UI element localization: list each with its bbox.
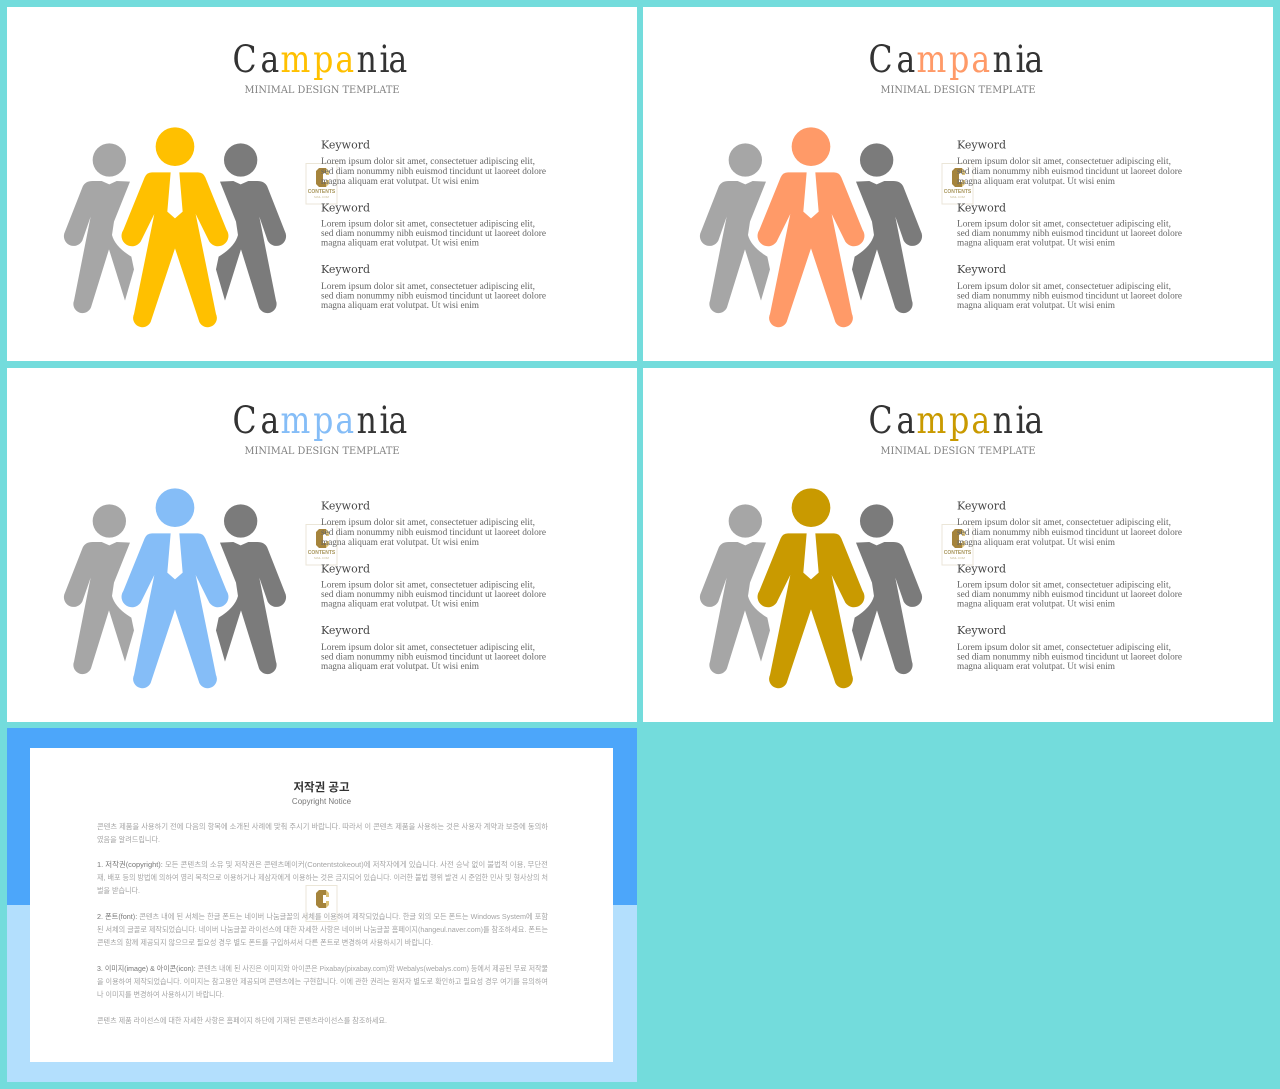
- text block: keywords: Keyword: [957, 263, 1006, 276]
- text block: keywords: magna aliquam erat volutpat. Ut wisi enim: [321, 238, 479, 248]
- text block: keywords: Keyword: [321, 624, 370, 637]
- text block: keywords: sed diam nonummy nibh euismod tincidunt ut laoreet dolore: [321, 652, 547, 662]
- icon: contents watermark: [942, 524, 973, 565]
- text block: keywords: magna aliquam erat volutpat. Ut wisi enim: [957, 537, 1115, 548]
- subtitle: MINIMAL DESIGN TEMPLATE: [244, 445, 400, 457]
- text block: keywords: Keyword: [321, 562, 370, 576]
- text block: keywords: sed diam nonummy nibh euismod tincidunt ut laoreet dolore: [321, 589, 547, 600]
- text block: keywords: [321, 138, 547, 311]
- subtitle: MINIMAL DESIGN TEMPLATE: [880, 445, 1036, 457]
- subheading: Copyright Notice: [292, 797, 352, 806]
- text block: keywords: magna aliquam erat volutpat. Ut wisi enim: [957, 661, 1115, 672]
- text block: keywords: Lorem ipsum dolor sit amet, consectetuer adipiscing elit,: [321, 281, 535, 292]
- subtitle: MINIMAL DESIGN TEMPLATE: [244, 84, 400, 96]
- text block: keywords: Lorem ipsum dolor sit amet, consectetuer adipiscing elit,: [957, 156, 1171, 167]
- icon: contents watermark: CONTENTS: [308, 550, 336, 556]
- icon: contents watermark: CONTENTS: [308, 189, 336, 195]
- text block: keywords: sed diam nonummy nibh euismod tincidunt ut laoreet dolore: [321, 527, 547, 538]
- text block: keywords: Lorem ipsum dolor sit amet, consectetuer adipiscing elit,: [957, 218, 1171, 230]
- text block: keywords: Keyword: [321, 500, 370, 512]
- text block: notice body: 였음을 알려드립니다.: [97, 834, 160, 844]
- text block: keywords: sed diam nonummy nibh euismod tincidunt ut laoreet dolore: [957, 166, 1183, 177]
- icon: contents watermark: MAIL.COM: [950, 195, 965, 199]
- text block: keywords: Keyword: [957, 562, 1006, 576]
- text block: notice body: [97, 821, 548, 1025]
- text block: keywords: Keyword: [957, 202, 1006, 214]
- heading: copyright notice: 저작권 공고: [293, 780, 350, 794]
- icon: contents watermark: MAIL.COM: [314, 195, 329, 199]
- text block: keywords: sed diam nonummy nibh euismod tincidunt ut laoreet dolore: [957, 589, 1183, 600]
- text block: keywords: magna aliquam erat volutpat. Ut wisi enim: [321, 598, 479, 610]
- icon: contents watermark: [306, 524, 337, 565]
- text block: keywords: sed diam nonummy nibh euismod tincidunt ut laoreet dolore: [957, 228, 1183, 239]
- text block: keywords: [957, 500, 1183, 672]
- title: Campania: [868, 400, 1043, 443]
- icon: contents watermark: [942, 164, 973, 204]
- text block: notice body: 나 이미지를 변경하여 사용하시기 바랍니다.: [97, 989, 224, 999]
- subtitle: MINIMAL DESIGN TEMPLATE: [880, 84, 1036, 96]
- text block: keywords: Lorem ipsum dolor sit amet, consectetuer adipiscing elit,: [321, 156, 535, 167]
- text block: keywords: magna aliquam erat volutpat. Ut wisi enim: [957, 300, 1115, 311]
- text block: notice body: 2. 폰트(font): 콘텐츠 내에 된 서체는 한글 폰트는 네이버 나눔글꼴의 서체를 이용하여 제작되었습니다. 한글 외의 모든 폰트는 Windows System에 포함: [97, 911, 548, 921]
- title: Campania: [232, 39, 407, 82]
- text block: notice body: 재, 배포 등의 방법에 의하여 영리 목적으로 이용하거나 제삼자에게 이용하는 것은 금지되어 있습니다. 이러한 불법 행위 발견 시 준엄한 민사 및 형사상의 처: [97, 872, 548, 882]
- text block: keywords: magna aliquam erat volutpat. Ut wisi enim: [321, 300, 479, 311]
- icon: contents watermark: CONTENTS: [944, 189, 972, 195]
- icon: contents watermark: [306, 164, 337, 204]
- text block: keywords: Lorem ipsum dolor sit amet, consectetuer adipiscing elit,: [957, 642, 1171, 653]
- text block: keywords: sed diam nonummy nibh euismod tincidunt ut laoreet dolore: [957, 290, 1183, 302]
- panel: orange slide: [643, 7, 1273, 361]
- text block: keywords: Keyword: [957, 624, 1006, 637]
- text block: keywords: Lorem ipsum dolor sit amet, consectetuer adipiscing elit,: [957, 580, 1171, 590]
- panel: gold slide: [643, 368, 1273, 722]
- text block: keywords: Keyword: [957, 500, 1006, 512]
- text block: keywords: Lorem ipsum dolor sit amet, consectetuer adipiscing elit,: [957, 517, 1171, 528]
- icon: contents watermark: MAIL.COM: [950, 556, 965, 560]
- title: Campania: [868, 39, 1043, 82]
- text block: notice body: 콘텐츠의 함께 제공되지 않으므로 필요성 경우 별도 폰트를 구입하셔서 다른 폰트로 변경하여 사용하시기 바랍니다.: [97, 937, 433, 947]
- icon: three business people: [700, 488, 922, 688]
- text block: keywords: magna aliquam erat volutpat. Ut wisi enim: [957, 176, 1115, 187]
- icon: contents watermark: MAIL.COM: [314, 556, 329, 560]
- text block: keywords: sed diam nonummy nibh euismod tincidunt ut laoreet dolore: [321, 166, 547, 177]
- panel: copyright notice: [7, 728, 637, 1082]
- text block: keywords: magna aliquam erat volutpat. Ut wisi enim: [957, 598, 1115, 610]
- icon: three business people: [64, 488, 286, 688]
- text block: keywords: [321, 500, 547, 672]
- text block: keywords: Keyword: [321, 202, 370, 214]
- text block: keywords: Keyword: [321, 138, 370, 152]
- text block: keywords: magna aliquam erat volutpat. Ut wisi enim: [321, 537, 479, 548]
- text block: keywords: magna aliquam erat volutpat. Ut wisi enim: [321, 661, 479, 672]
- text block: keywords: sed diam nonummy nibh euismod tincidunt ut laoreet dolore: [957, 652, 1183, 662]
- text block: notice body: 1. 저작권(copyright): 모든 콘텐츠의 소유 및 저작권은 콘텐츠메이커(Contentstokeout)에 저작자에게 있습니다. 사전 승낙 없이 불법적 이용, 무단전: [97, 859, 548, 869]
- text block: keywords: Lorem ipsum dolor sit amet, consectetuer adipiscing elit,: [321, 580, 535, 590]
- text block: notice body: 콘텐츠 제품을 사용하기 전에 다음의 항목에 소개된 사례에 맞춰 주시기 바랍니다. 따라서 이 콘텐츠 제품을 사용하는 것은 사용자 계약과 보증에 동의하: [97, 821, 548, 831]
- icon: three business people: [700, 127, 922, 327]
- panel: yellow slide: [7, 7, 637, 361]
- text block: notice body: 3. 이미지(image) & 아이콘(icon): 콘텐츠 내에 된 사진은 이미지와 아이콘은 Pixabay(pixabay.com)와 Webalys(webalys.com) 등에서 제공된 무료 저작물: [97, 963, 548, 973]
- panel: blue slide: [7, 368, 637, 722]
- text block: keywords: sed diam nonummy nibh euismod tincidunt ut laoreet dolore: [321, 290, 547, 302]
- text block: keywords: magna aliquam erat volutpat. Ut wisi enim: [321, 176, 479, 187]
- text block: keywords: Keyword: [321, 263, 370, 276]
- text block: notice body: 콘텐츠 제품 라이선스에 대한 자세한 사항은 홈페이지 하단에 기재된 콘텐츠라이선스를 참조하세요.: [97, 1015, 387, 1025]
- text block: keywords: Lorem ipsum dolor sit amet, consectetuer adipiscing elit,: [321, 642, 535, 653]
- text block: keywords: sed diam nonummy nibh euismod tincidunt ut laoreet dolore: [957, 527, 1183, 538]
- text block: keywords: Lorem ipsum dolor sit amet, consectetuer adipiscing elit,: [321, 517, 535, 528]
- text block: keywords: Lorem ipsum dolor sit amet, consectetuer adipiscing elit,: [321, 218, 535, 230]
- icon: contents watermark: CONTENTS: [944, 550, 972, 556]
- text block: keywords: Keyword: [957, 138, 1006, 152]
- text block: keywords: sed diam nonummy nibh euismod tincidunt ut laoreet dolore: [321, 228, 547, 239]
- text block: notice body: 을 이용하여 제작되었습니다. 이미지는 참고용만 제공되며 콘텐츠에는 구현합니다. 이에 관한 권리는 원저자 별도로 확인하고 필요성 경우 여기를 유의하여: [97, 976, 548, 986]
- title: Campania: [232, 400, 407, 443]
- text block: keywords: magna aliquam erat volutpat. Ut wisi enim: [957, 238, 1115, 248]
- text block: notice body: 된 서체의 글꼴로 제작되었습니다. 네이버 나눔글꼴 라이선스에 대한 자세한 사항은 네이버 나눔글꼴 홈페이지(hangeul.naver.com)를 참조하세요. 폰트는: [97, 924, 548, 934]
- text block: keywords: Lorem ipsum dolor sit amet, consectetuer adipiscing elit,: [957, 281, 1171, 292]
- icon: three business people: [64, 127, 286, 327]
- text block: notice body: 벌을 받습니다.: [97, 885, 140, 895]
- text block: keywords: [957, 138, 1183, 311]
- icon: contents watermark: [306, 886, 337, 922]
